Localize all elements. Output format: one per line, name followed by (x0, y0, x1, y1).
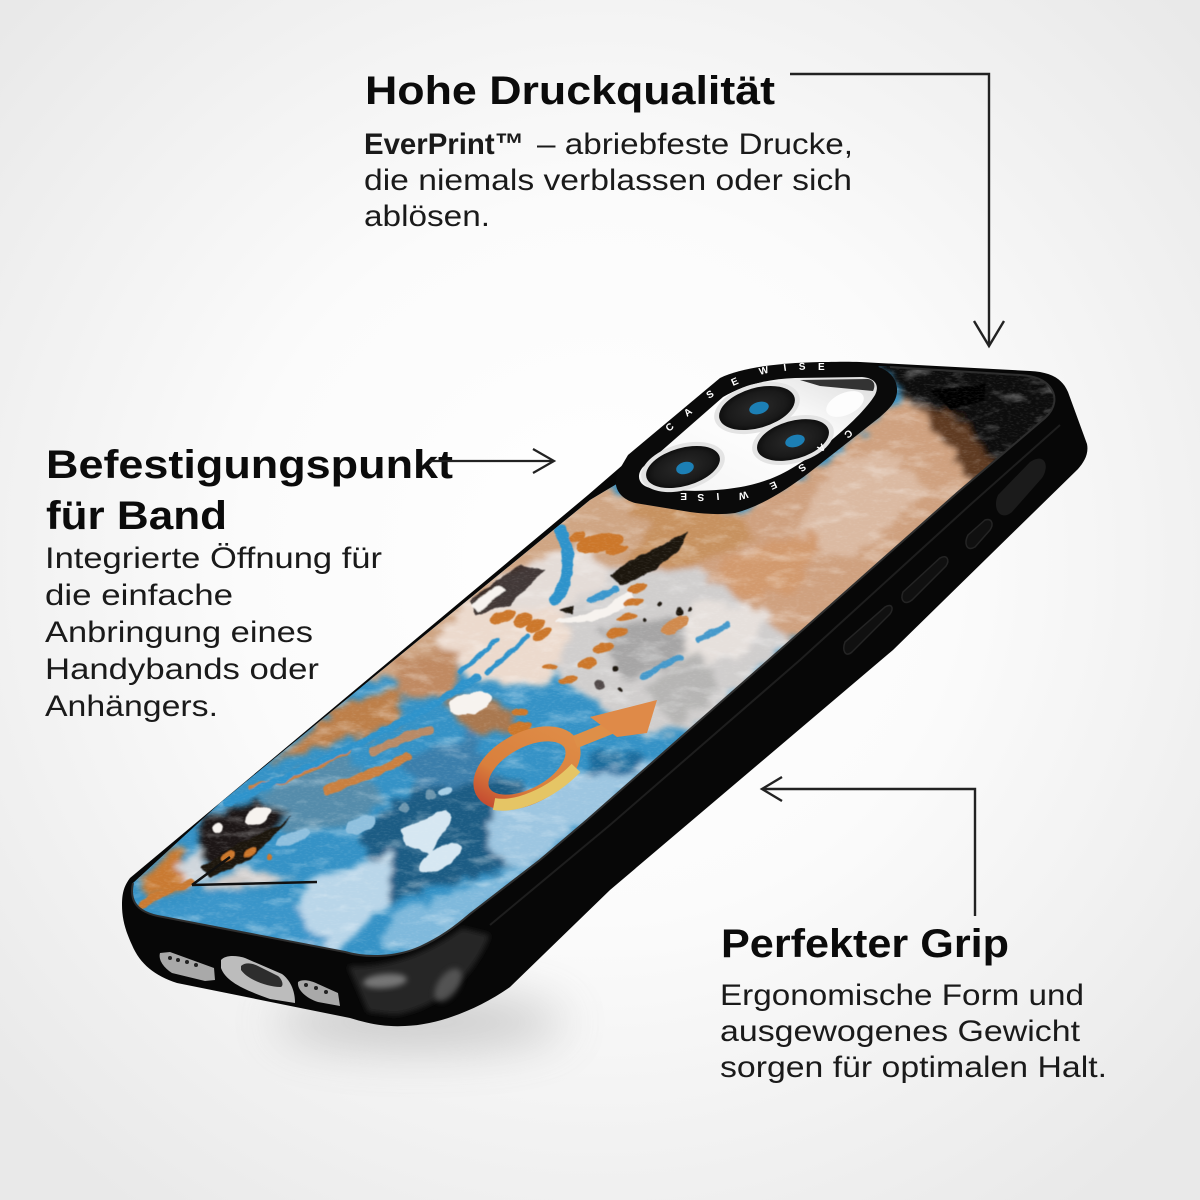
side rail line (490, 425, 1060, 925)
brand lettering top: E (818, 362, 825, 373)
charging port (221, 956, 295, 1003)
pale blue lower area (285, 855, 395, 950)
callout: grip (720, 922, 1107, 1084)
orange ring symbol (470, 700, 657, 816)
description (45, 542, 382, 723)
brand lettering bottom: E (680, 490, 687, 501)
arrow: print quality (790, 74, 1004, 346)
arrow: strap attachment (430, 449, 554, 473)
black smudges (200, 385, 985, 878)
bump frame (616, 362, 897, 514)
brown edge (900, 400, 1000, 510)
brand lettering top: A (682, 406, 695, 419)
heading (46, 443, 453, 538)
brand lettering top: C (664, 421, 676, 434)
white and grey middle (540, 570, 790, 735)
heading: für Band (46, 494, 227, 538)
case body (122, 362, 1087, 1026)
brown left patch (395, 650, 460, 700)
description: Anbringung eines (45, 616, 313, 649)
description (720, 979, 1107, 1084)
pale blotches (274, 786, 466, 879)
description: ablösen. (364, 200, 490, 233)
description: die niemals verblassen oder sich (364, 164, 852, 197)
lens left (635, 433, 731, 501)
description: Integrierte Öffnung für (45, 542, 382, 575)
orange corner (140, 845, 192, 900)
white marks (213, 585, 635, 833)
callout: print quality (364, 69, 853, 233)
orange drops (219, 530, 692, 863)
brand lettering bottom: C (842, 427, 854, 440)
brand lettering bottom: S (796, 461, 808, 474)
screen rim (132, 367, 1054, 956)
speaker grille left (160, 952, 215, 981)
brand lettering top (664, 362, 825, 434)
black triangle line (192, 857, 317, 885)
upper left tan edge (355, 480, 650, 680)
callout: strap attachment (45, 443, 453, 723)
side buttons (844, 459, 1046, 654)
brand lettering top: S (798, 362, 806, 373)
orange streaks (142, 530, 727, 905)
arrow: grip (762, 777, 975, 916)
print artwork (133, 366, 1054, 955)
blue strokes (556, 530, 568, 600)
brand lettering top: S (705, 388, 717, 402)
description: – abriebfeste Drucke, (537, 128, 853, 161)
brand lettering bottom: A (815, 441, 827, 454)
phone shadow (275, 996, 565, 1048)
paint details (142, 385, 985, 905)
brand lettering bottom: S (697, 491, 704, 502)
dark splash (200, 800, 290, 865)
lens top (708, 373, 806, 443)
brand lettering bottom (680, 427, 854, 502)
heading: Hohe Druckqualität (365, 69, 775, 113)
brand lettering bottom: W (737, 488, 749, 501)
pale right of ring (490, 760, 660, 870)
mottled paint (133, 369, 1052, 955)
black top end of print (860, 350, 1080, 510)
speaker grille right (298, 980, 340, 1006)
window top reflection (800, 379, 874, 391)
description: die einfache (45, 579, 233, 612)
brand lettering top: E (730, 376, 741, 389)
description: ausgewogenes Gewicht (720, 1015, 1081, 1048)
phone case (100, 340, 1100, 1026)
heading: Perfekter Grip (721, 922, 1009, 966)
deep blue (360, 780, 545, 905)
glossy corner (348, 928, 490, 1015)
description: Ergonomische Form und (720, 979, 1084, 1012)
glass window (639, 377, 877, 491)
camera bump (616, 362, 897, 514)
brand lettering top: I (783, 363, 787, 374)
brand lettering bottom: E (767, 478, 778, 491)
description: sorgen für optimalen Halt. (720, 1051, 1107, 1084)
description: EverPrint™ (364, 128, 524, 161)
grey blue streak (260, 750, 390, 830)
description: Anhängers. (45, 690, 218, 723)
lens right (746, 406, 840, 474)
description: Handybands oder (45, 653, 319, 686)
paint texture (133, 366, 1054, 954)
heading: Befestigungspunkt (46, 443, 453, 487)
brand lettering bottom: I (716, 490, 720, 501)
flash (822, 386, 868, 422)
brand lettering top: W (758, 365, 770, 378)
description (364, 128, 853, 233)
tan area (612, 392, 974, 644)
peach upper left (435, 590, 570, 685)
